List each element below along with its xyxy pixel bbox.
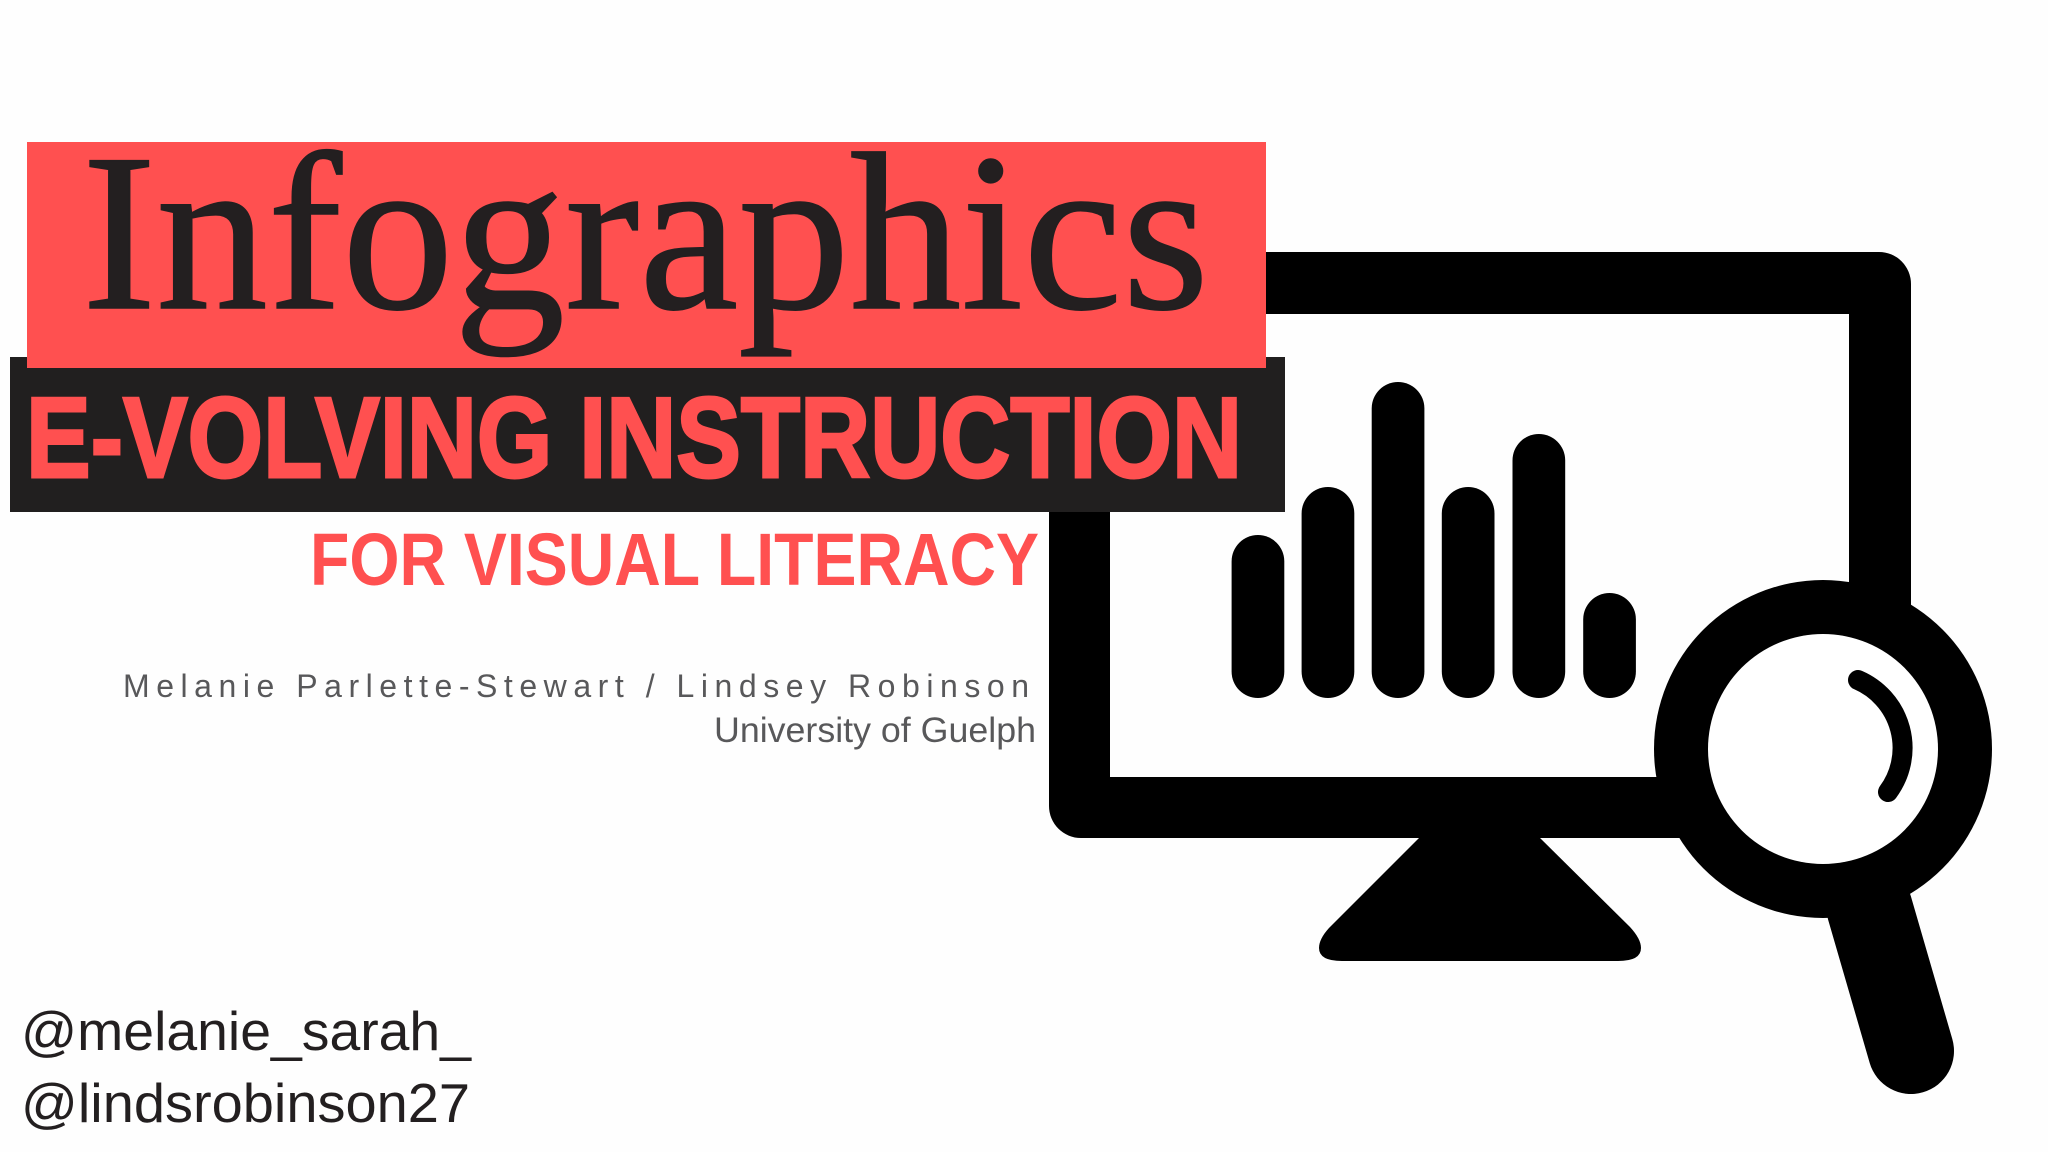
text block: university: University of Guelph: [714, 711, 1036, 750]
text block: authors: Melanie Parlette-Stewart / Lindsey Robinson: [123, 668, 1029, 704]
panel: red title band: [27, 107, 1266, 368]
icon: monitor frame: [1049, 252, 1911, 838]
bar chart: [1232, 382, 1636, 698]
icon: magnifying glass: [1654, 580, 1992, 1051]
heading: for visual literacy: FOR VISUAL LITERACY: [310, 518, 1039, 601]
text block: social handles: @melanie_sarah_: [21, 1000, 472, 1062]
icon: monitor stand: [1319, 835, 1641, 961]
icon: monitor with bar chart and magnifying glass: [1049, 252, 1992, 1051]
panel: dark subtitle band: [10, 357, 1285, 512]
text block: social handles: [21, 1000, 472, 1134]
text block: social handles: @lindsrobinson27: [21, 1072, 470, 1134]
heading: E-Volving Instruction: E-VOLVING INSTRUCTION: [26, 375, 1242, 502]
title: Infographics: Infographics: [82, 107, 1209, 357]
